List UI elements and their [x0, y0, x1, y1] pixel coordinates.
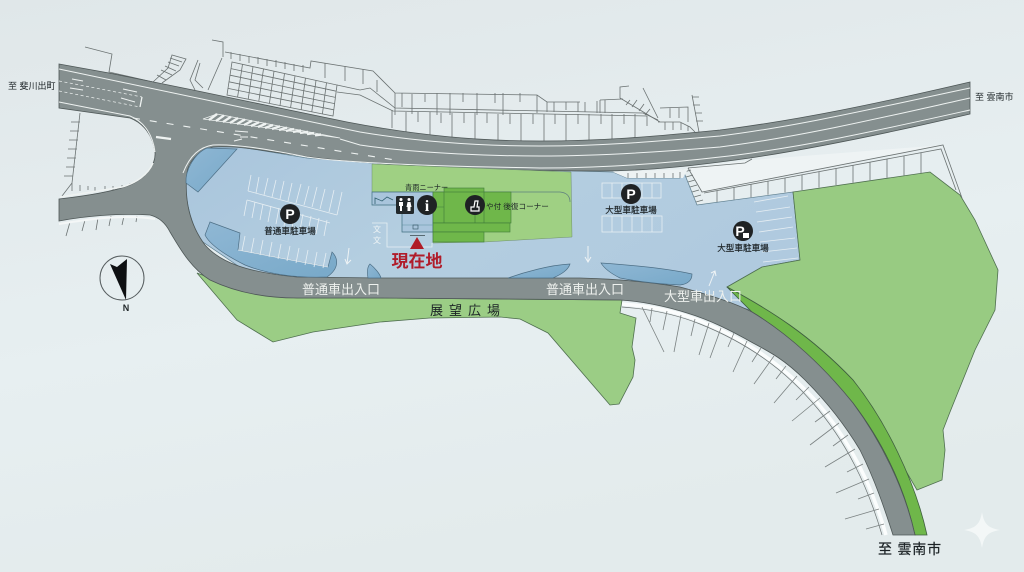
parking and pedestrian area (blue): [186, 147, 800, 310]
icon: bus parking P: [621, 184, 641, 204]
rest building outline: [433, 192, 570, 202]
road network: [59, 64, 970, 535]
icon: sparkle watermark: [964, 512, 1000, 548]
background terrain lines north of the road: [62, 40, 703, 236]
label: car entrance west: 普通車出入口: [302, 282, 380, 297]
label: car entrance east: 普通車出入口: [546, 282, 624, 297]
label: current location: 現在地: [392, 252, 442, 271]
label: to Unnan top right: 至 雲南市: [975, 91, 1014, 102]
label: corner above toilets: 青雨ニーナー: [405, 183, 448, 192]
bus parking lines east: [754, 196, 798, 262]
icon: truck parking P: [733, 221, 753, 241]
icon: truck parking P: P: [735, 223, 745, 239]
parking islands: [186, 148, 692, 285]
building and garden area: 文: [373, 224, 381, 234]
label: to Hikawa: 至 斐川出町: [8, 80, 56, 91]
building and garden area: [372, 164, 572, 247]
east fence band behind green: [688, 145, 943, 192]
landscaped area east: [727, 172, 998, 490]
zebra hatching: [203, 114, 340, 138]
icon: information: i: [425, 198, 430, 215]
label: shop corner: や付 後復コーナー: [486, 201, 549, 211]
icon: north arrow: N: [123, 303, 129, 313]
roadside rail along south curve: [622, 304, 886, 535]
indoor blue area: [372, 192, 433, 232]
label: car parking: 普通車駐車場: [264, 225, 316, 236]
label: bus entrance: 大型車出入口: [664, 289, 742, 304]
building and garden area: 文: [373, 235, 381, 245]
landscaped area south of road: [197, 273, 636, 405]
car parking lines west: [238, 175, 342, 268]
icon: bus parking P: P: [626, 186, 636, 202]
label: truck parking: 大型車駐車場: [717, 242, 769, 253]
tick lines south of curve: [642, 307, 884, 529]
hatched strip north of bus parking: [613, 169, 688, 178]
bus parking lines centre: [602, 183, 662, 232]
icon: current location marker: [410, 237, 424, 249]
west branch south rail: [59, 217, 155, 224]
direction arrows: [345, 246, 716, 286]
icon: north arrow: [100, 256, 144, 313]
icon: car parking P: [280, 204, 300, 224]
road markings: [59, 69, 970, 197]
label: bus parking: 大型車駐車場: [605, 204, 657, 215]
label: viewing plaza: 展望広場: [430, 303, 506, 318]
shop block: [433, 188, 511, 242]
icon: shop: [465, 195, 485, 215]
icon: car parking P: P: [285, 206, 295, 222]
label: to Unnan bottom: 至 雲南市: [878, 541, 942, 557]
east fence and parking strip: [684, 145, 962, 202]
icon: toilets: [396, 196, 414, 214]
icon: information: [417, 195, 437, 215]
green verge strip: [727, 287, 927, 535]
